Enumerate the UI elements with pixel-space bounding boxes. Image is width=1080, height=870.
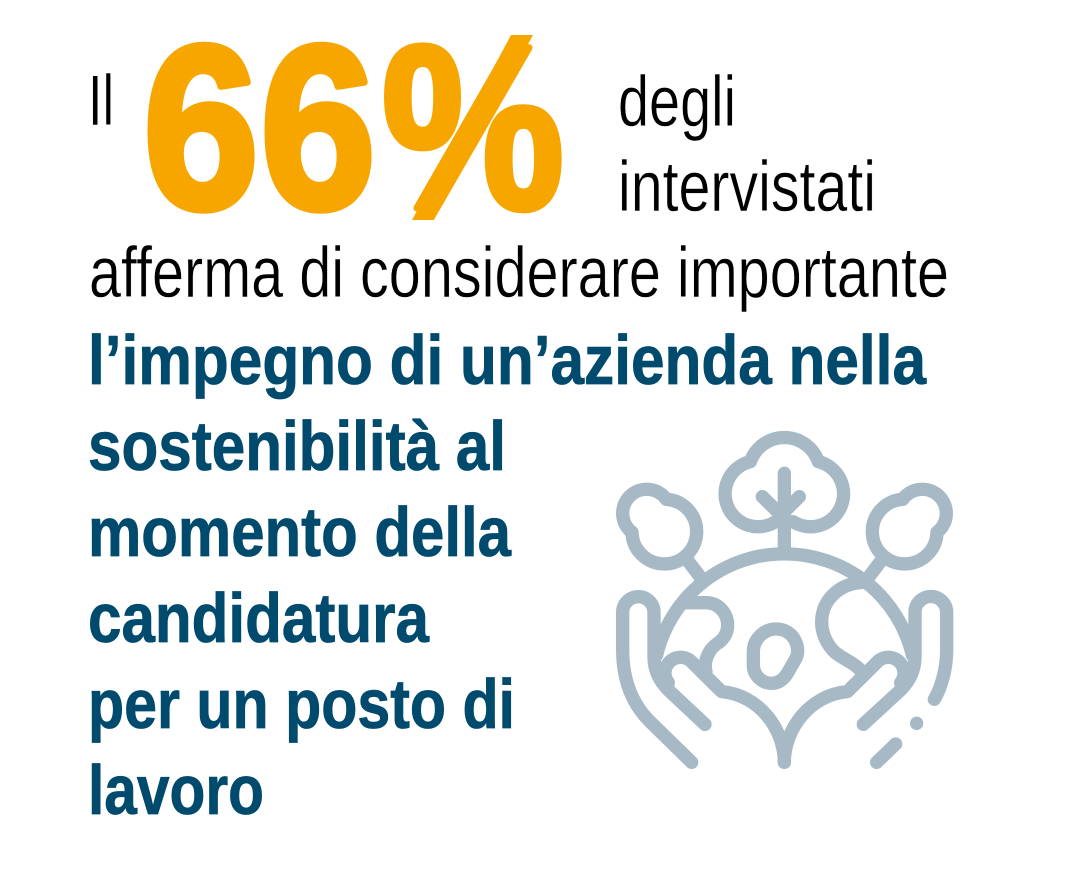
text: degli intervistati: intervistati — [618, 148, 876, 227]
text: Il: Il — [88, 62, 114, 141]
big number: 66%: % — [382, 0, 564, 258]
highlighted statement: sostenibilità al — [88, 407, 506, 485]
text: degli intervistati: degli — [618, 63, 736, 142]
text: degli intervistati — [618, 63, 876, 227]
icon: hands holding globe with trees — [623, 437, 947, 762]
big number: 66%: 6 — [260, 0, 376, 258]
highlighted statement: candidatura — [88, 579, 430, 657]
highlighted statement: momento della — [88, 493, 512, 571]
highlighted statement: per un posto di — [88, 665, 515, 743]
highlighted statement: lavoro — [88, 751, 264, 829]
highlighted statement: l’impegno di un’azienda nella — [88, 321, 927, 399]
icon: right tree — [869, 489, 946, 577]
big number: 66% — [143, 0, 564, 258]
icon: globe — [657, 554, 912, 683]
icon: right hand — [784, 596, 947, 762]
big number: 66%: 6 — [143, 0, 259, 258]
icon: centre tree — [725, 437, 844, 553]
highlighted statement — [88, 321, 927, 829]
icon: left hand — [623, 597, 784, 762]
icon: left tree — [623, 489, 700, 577]
